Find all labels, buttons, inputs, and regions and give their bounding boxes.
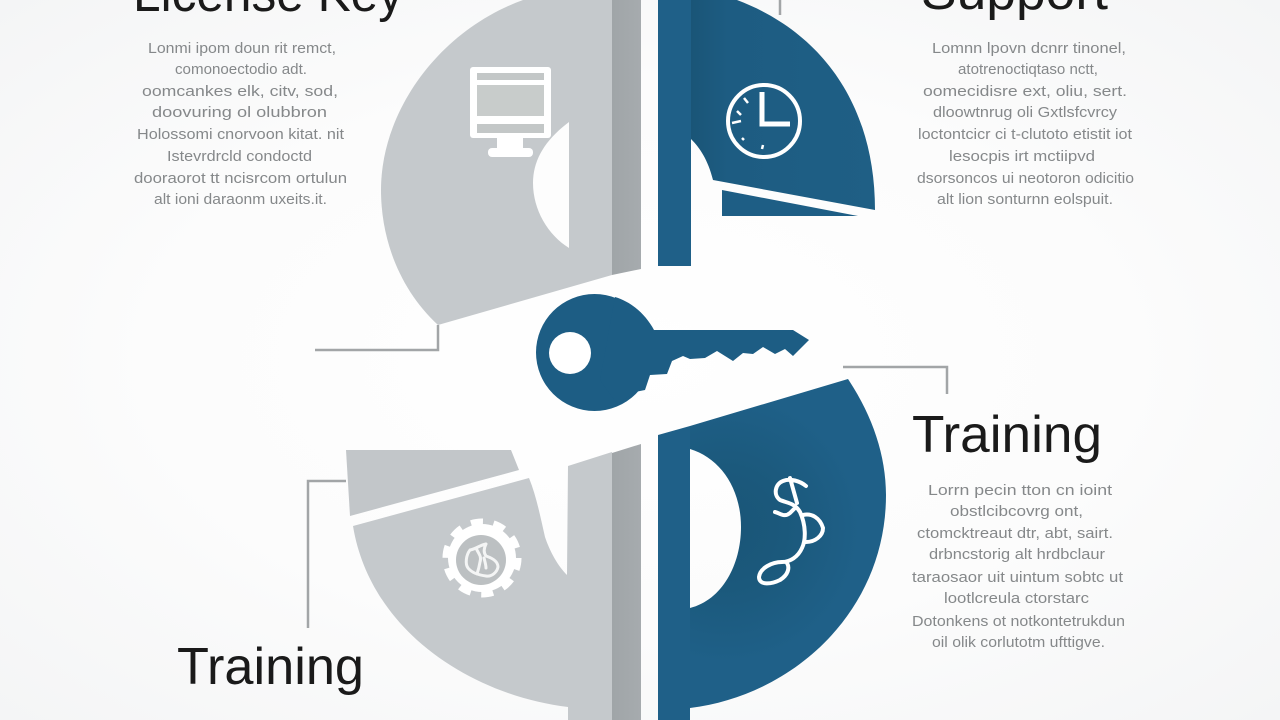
text block: Training body: obstlcibcovrg ont, [950,503,1083,520]
text block: License Key body: oomcankes elk, citv, sod, [142,83,338,100]
text block: Support body: lesocpis irt mctiipvd [949,148,1095,165]
text block: License Key body: alt ioni daraonm uxeits.it. [154,191,327,208]
panel: bottom-left grey segment [346,444,641,720]
text block: Training body: Dotonkens ot notkontetrukdun [912,613,1125,630]
panel: top-right blue segment [658,0,875,266]
icon: monitor [470,67,551,157]
icon: dollar chain [759,478,823,583]
heading: Training left: Training [177,638,364,696]
text block: Support body: oomecidisre ext, oliu, sert. [923,83,1127,100]
text block: License Key body [134,40,347,208]
text block: License Key body: Holossomi cnorvoon kitat. nit [137,126,345,143]
text block: Training body: oil olik corlutotm ufttigve. [932,634,1105,651]
text block: Support body: dsorsoncos ui neotoron odicitio [917,170,1134,187]
text block: Support body [917,40,1134,208]
text block: License Key body: doovuring ol olubbron [152,104,327,121]
panel: top-left grey segment [381,0,641,325]
text block: Training body: Lorrn pecin tton cn ioint [928,482,1113,499]
text block: Training body: taraosaor uit uintum sobtc ut [912,569,1124,586]
text block: Training body: lootlcreula ctorstarc [944,590,1090,607]
text block: License Key body: dooraorot tt ncisrcom ortulun [134,170,347,187]
text block: Training body: ctomcktreaut dtr, abt, sairt. [917,525,1113,542]
text block: License Key body: Istevrdrcld condoctd [167,148,312,165]
text block: Support body: dloowtnrug oli Gxtlsfcvrcy [933,104,1118,121]
text block: Support body: atotrenoctiqtaso nctt, [958,61,1098,78]
text block: License Key body: Lonmi ipom doun rit remct, [148,40,336,57]
text block: License Key body: comonoectodio adt. [175,61,307,78]
text block: Support body: Lomnn lpovn dcnrr tinonel, [932,40,1126,57]
heading: Training right: Training [912,406,1102,464]
panel: bottom-right blue segment [658,379,886,720]
icon: gear [446,522,518,594]
text block: Support body: loctontcicr ci t-clutoto etistit iot [918,126,1133,143]
text block: Training body: drbncstorig alt hrdbclaur [929,546,1105,563]
icon: key [536,294,809,411]
icon: clock [728,85,800,157]
text block: Training body [912,482,1125,651]
text block: Support body: alt lion sonturnn eolspuit. [937,191,1113,208]
leader lines [308,0,947,628]
